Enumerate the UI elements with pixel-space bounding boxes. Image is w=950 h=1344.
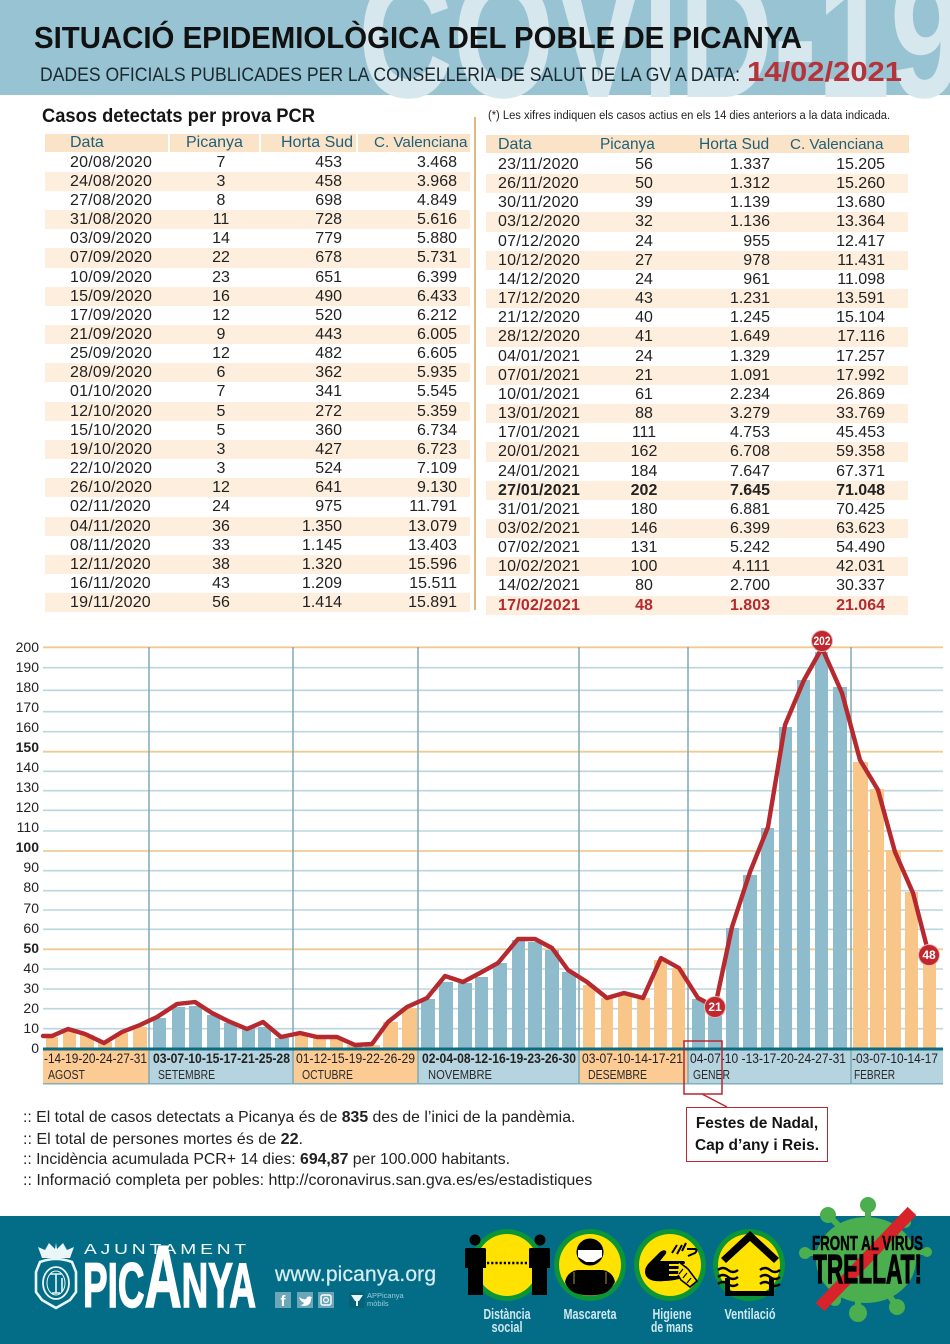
right data table: 45.453 [836,424,885,441]
info text: link: :: Informació completa per pobles: http://coronavirus.san.gva.es/es/estadistiques [23,1172,592,1189]
right data table: 15.205 [836,156,885,173]
left data table: 490 [315,288,342,305]
right data table: 39 [635,194,653,211]
right data table: 07/01/2021 [498,367,580,384]
right data table: 100 [631,558,657,575]
marker: peak 202 [812,630,832,652]
left data table: 5.616 [417,211,457,228]
footnote: (*) Les xifres indiquen els casos actius en els 14 dies anteriors a la data indicada. [488,108,890,122]
left data table: 482 [315,345,342,362]
heading: PCR cases: Casos detectats per prova PCR [42,105,315,127]
callout: holidays [686,1107,828,1162]
right data table: 955 [743,233,770,250]
right data table: 32 [635,213,653,230]
icon: ventilation [713,1229,785,1301]
y axis labels: 180 [16,679,39,695]
date labels: 01-12-15-19-22-26-29 [296,1051,415,1066]
right data table: 67.371 [836,462,885,480]
right data table: 1.139 [730,194,770,211]
left data table: 9 [217,326,225,343]
left data table: 7 [217,154,225,171]
right data table: 59.358 [836,443,885,460]
left table header: C. Valenciana [374,134,467,151]
left data table: 15/10/2020 [70,422,152,439]
right data table: 6.399 [730,520,770,537]
left data table: 23 [212,269,230,286]
right data table: 11.431 [837,252,885,269]
left data table: 975 [315,498,342,515]
month labels: OCTUBRE [302,1067,353,1082]
right data table: 2.234 [730,386,770,403]
right data table: 40 [635,309,653,326]
left data table: 678 [315,249,342,266]
right data table: 1.337 [730,156,770,173]
chart: active cases over time [16,630,943,1107]
left data table: 56 [212,594,230,611]
right data table: 10/12/2020 [498,252,580,269]
left data table: 3.468 [417,154,457,171]
left data table: 26/10/2020 [70,479,152,496]
right data table: 26.869 [836,386,885,403]
info text: total deaths: :: El total de persones mortes és de 22. [23,1130,303,1148]
icon: municipal crest [36,1243,76,1308]
right data table: 14/02/2021 [498,577,580,594]
left data table: 16 [212,288,230,305]
left data table: 6.399 [417,269,457,286]
footer [0,1197,950,1344]
y axis labels: 170 [16,699,39,715]
right data table: 21/12/2020 [498,309,580,326]
left data table: 5.880 [417,230,457,247]
left data table: 01/10/2020 [70,383,152,400]
right data table: 23/11/2020 [498,156,579,173]
subtitle: DADES OFICIALS PUBLICADES PER LA CONSELLERIA DE SALUT DE LA GV A DATA: [40,65,740,86]
date labels: -03-07-10-14-17 [852,1051,938,1066]
marker: peak 202: 202 [814,634,831,648]
right data table: 14/12/2020 [498,271,580,288]
left data table: 19/11/2020 [70,594,151,611]
logo: Picanya wordmark: PICANYA [83,1229,256,1327]
right data table: 111 [632,424,656,441]
title: SITUACIÓ EPIDEMIOLÒGICA DEL POBLE DE PICANYA [34,19,802,55]
marker: latest 48: 48 [922,948,936,962]
left data table: 5 [217,403,225,420]
month labels: SETEMBRE [158,1067,215,1082]
right data table: 54.490 [836,539,885,556]
left data table: 13.079 [408,518,457,535]
left data table: 12/11/2020 [70,556,151,573]
y axis labels: 190 [16,659,39,675]
right data table: 30/11/2020 [498,194,579,211]
right data table: 6.881 [730,501,770,518]
left data table: 5.359 [417,403,457,420]
icon: app [349,1292,365,1308]
right data table: 04/01/2021 [498,348,580,365]
right data table: 42.031 [836,558,885,575]
icon: Facebook: f [280,1293,286,1310]
icon labels: Higiene [652,1306,692,1323]
right data table: 3.279 [730,405,770,422]
y axis labels: 90 [23,859,39,875]
app label: APPicanya [367,1291,405,1300]
right data table: 2.700 [730,577,770,594]
icon: Twitter [297,1292,313,1308]
right data table: 33.769 [836,405,885,422]
icon labels: de mans [651,1319,693,1336]
y axis labels: 130 [16,779,39,795]
right data table: 17.257 [836,348,885,365]
right data table: 4.753 [730,424,770,441]
left data table: 24/08/2020 [70,173,152,190]
left data table: 1.209 [302,575,342,592]
right data table: 10/02/2021 [498,558,580,575]
right table header: Data [498,136,532,153]
blue bars [153,652,847,1049]
right data table: 1.136 [730,213,770,230]
left data table: 520 [315,307,342,324]
left data table: 15/09/2020 [70,288,152,305]
y axis labels: 100 [16,839,39,855]
left data table: 7 [217,383,225,400]
left table header: Picanya [186,134,243,151]
right table header: Horta Sud [699,136,769,153]
x axis [43,1048,943,1050]
left data table: 08/11/2020 [70,537,151,554]
left data table: 6 [217,364,225,381]
right data table: 20/01/2021 [498,443,580,460]
right data table: 56 [635,156,653,173]
icon: Instagram [318,1292,334,1308]
left data table: 43 [212,575,230,592]
right data table: 88 [635,405,653,422]
left data table: 5.935 [417,364,457,381]
right data table: 17.116 [837,328,885,345]
left data table: 362 [315,364,342,381]
left data table: 20/08/2020 [70,154,152,171]
left data table: 16/11/2020 [70,575,151,592]
left data table: 11 [213,211,229,228]
right data table: 6.708 [730,443,770,460]
app label: mòbils [367,1299,389,1308]
left data table: 17/09/2020 [70,307,152,324]
left data table: 6.212 [417,307,457,324]
left data table: 07/09/2020 [70,249,152,266]
right data table: 21 [635,367,653,384]
marker: low 21: 21 [708,1000,722,1014]
left data table: 12/10/2020 [70,403,152,420]
right data table: 17/12/2020 [498,290,580,307]
left data table: 3 [217,441,225,458]
left data table: 1.350 [302,518,342,535]
y axis labels: 20 [23,1000,39,1016]
date labels: 03-07-10-14-17-21 [582,1051,683,1066]
left data table: 443 [315,326,342,343]
left data table: 15.596 [408,556,457,573]
month labels: FEBRER [854,1067,895,1082]
right data table: 26/11/2020 [498,175,579,192]
left data table: 22/10/2020 [70,460,152,477]
right data table: 7.645 [730,482,770,499]
left data table: 5.731 [417,249,457,266]
left table header: Data [70,134,104,151]
right data table: 11.098 [837,271,885,288]
month labels: AGOST [48,1067,85,1082]
icon labels: Distància [484,1306,531,1323]
right data table: 27 [635,252,653,269]
y axis labels [16,639,39,1056]
right data table: 5.242 [730,539,770,556]
left data table: 11.791 [409,498,457,515]
right data table: 31/01/2021 [498,501,580,518]
icon labels: social [492,1319,522,1336]
left data table: 6.723 [417,441,457,458]
right data table: 70.425 [836,501,885,518]
left data table: 360 [315,422,342,439]
icon labels: Ventilació [724,1306,776,1323]
y axis labels: 140 [16,759,39,775]
right data table: 24 [635,233,653,250]
callout: holidays: Festes de Nadal, [696,1115,818,1132]
left data table: 6.734 [417,422,457,439]
left data table: 779 [315,230,342,247]
left data table: 22 [212,249,230,266]
date: 14/02/2021 [747,56,902,87]
left data table: 6.605 [417,345,457,362]
date labels [44,1051,938,1066]
month labels: NOVEMBRE [428,1067,492,1082]
y axis labels: 150 [16,739,39,755]
right data table: 1.329 [730,348,770,365]
right data table: 15.104 [836,309,885,326]
marker: latest 48 [918,944,940,966]
right data table: 21.064 [836,597,885,614]
date labels: 02-04-08-12-16-19-23-26-30 [422,1051,576,1066]
y axis labels: 80 [23,879,39,895]
callout: holidays: Cap d’any i Reis. [695,1137,819,1154]
left data table: 698 [315,192,342,209]
left data table: 12 [212,345,230,362]
right data table: 07/02/2021 [498,539,580,556]
left data table: 524 [315,460,342,477]
connector to callout [702,1094,727,1107]
right data table: 48 [635,597,653,614]
y axis labels: 10 [23,1020,39,1036]
y axis labels: 110 [17,819,39,835]
left data table: 272 [315,403,342,420]
right data table: 28/12/2020 [498,328,580,345]
right data table: 03/12/2020 [498,213,580,230]
marker: low 21 [704,996,726,1018]
left data table: 1.320 [302,556,342,573]
left data table: 458 [315,173,342,190]
left data table: 1.414 [302,594,342,611]
right data table: 17/02/2021 [498,597,580,614]
y axis labels: 160 [16,719,39,735]
website: www.picanya.org [274,1263,436,1286]
right data table: 71.048 [836,482,885,499]
right data table: 13.364 [836,213,885,230]
left data table: 8 [217,192,225,209]
right data table: 30.337 [836,577,885,594]
icon: social distance [465,1229,550,1301]
left data table: 3.968 [417,173,457,190]
right data table: 13/01/2021 [498,405,580,422]
right data table: 03/02/2021 [498,520,580,537]
right data table: 162 [631,443,657,460]
right data table: 50 [635,175,653,192]
left data table: 15.891 [408,594,457,611]
month labels: GENER [693,1067,730,1082]
left data table: 31/08/2020 [70,211,152,228]
right data table: 146 [631,520,657,537]
right data table [486,156,908,615]
right data table: 17/01/2021 [498,424,580,441]
y axis labels: 50 [23,940,39,956]
left data table: 02/11/2020 [70,498,151,515]
right data table: 24 [635,271,653,288]
left table header [45,134,470,152]
month bands [43,1050,943,1084]
left data table: 341 [315,383,342,400]
y axis labels: 70 [23,900,39,916]
month labels: DESEMBRE [588,1067,647,1082]
logo: Ajuntament wordmark: AJUNTAMENT [84,1241,250,1258]
left data table: 651 [315,269,342,286]
right data table: 978 [743,252,770,269]
right data table: 10/01/2021 [498,386,580,403]
header banner [0,0,950,100]
orange bars [46,762,936,1049]
icon labels: Mascareta [564,1306,617,1323]
y axis labels: 60 [23,920,39,936]
left data table: 641 [315,479,342,496]
left data table: 10/09/2020 [70,269,152,286]
right data table: 63.623 [836,520,885,537]
case line [43,648,929,1045]
left data table: 427 [315,441,342,458]
left data table: 453 [315,154,342,171]
right table header [486,135,909,153]
left data table: 14 [212,230,230,247]
right data table: 43 [635,290,653,307]
left data table: 4.849 [417,192,457,209]
right data table: 184 [631,462,657,480]
left data table: 24 [212,498,230,515]
right table header: Picanya [600,136,655,153]
left data table: 3 [217,173,225,190]
y axis labels: 200 [16,639,39,655]
right data table: 13.680 [836,194,885,211]
right data table: 1.231 [730,290,770,307]
right data table: 1.091 [730,367,770,384]
left data table [45,154,470,612]
right data table: 1.649 [730,328,770,345]
left data table: 27/08/2020 [70,192,152,209]
left data table: 38 [212,556,230,573]
right data table: 80 [635,577,653,594]
right data table: 24/01/2021 [498,462,580,480]
y axis labels: 0 [31,1040,39,1056]
right data table: 24 [635,348,653,365]
right table header: C. Valenciana [790,136,883,153]
icon: Facebook [275,1292,291,1310]
left data table: 6.433 [417,288,457,305]
left data table: 15.511 [409,575,457,592]
y axis labels: 120 [16,799,39,815]
right data table: 1.245 [730,309,770,326]
info text: total cases: :: El total de casos detectats a Picanya és de 835 des de l’inici de la pandèmia. [23,1109,575,1126]
left data table: 728 [315,211,342,228]
month labels [48,1067,895,1082]
left data table: 3 [217,460,225,477]
left data table: 19/10/2020 [70,441,152,458]
right data table: 4.111 [732,558,770,575]
left data table: 9.130 [417,479,457,496]
right data table: 17.992 [836,367,885,384]
right data table: 961 [743,271,770,288]
left data table: 25/09/2020 [70,345,152,362]
right data table: 1.312 [730,175,770,192]
icon labels [484,1306,776,1336]
date labels: 03-07-10-15-17-21-25-28 [153,1051,290,1066]
right data table: 131 [631,539,657,556]
date labels: -14-19-20-24-27-31 [44,1051,147,1066]
left data table: 36 [212,518,230,535]
right data table: 12.417 [836,233,885,250]
info text: incidence: :: Incidència acumulada PCR+ 14 dies: 694,87 per 100.000 habitants. [23,1151,510,1168]
icon: face mask [554,1229,626,1301]
left data table: 03/09/2020 [70,230,152,247]
left data table: 5 [217,422,225,439]
y axis labels: 30 [23,980,39,996]
right data table: 27/01/2021 [498,482,580,499]
badge: front al virus [799,1197,932,1322]
left data table: 04/11/2020 [70,518,151,535]
right data table: 1.803 [730,597,770,614]
left data table: 1.145 [302,537,342,554]
left data table: 12 [212,479,230,496]
left data table: 6.005 [417,326,457,343]
right data table: 7.647 [730,462,770,480]
right data table: 61 [635,386,653,403]
left data table: 28/09/2020 [70,364,152,381]
left data table: 21/09/2020 [70,326,152,343]
holiday highlight box [684,1041,722,1094]
right data table: 15.260 [836,175,885,192]
left data table: 33 [212,537,230,554]
y axis labels: 40 [23,960,39,976]
left data table: 5.545 [417,383,457,400]
left data table: 13.403 [408,537,457,554]
right data table: 41 [635,328,653,345]
right data table: 13.591 [836,290,885,307]
divider between tables [474,117,476,610]
left data table: 12 [212,307,230,324]
date labels: 04-07-10 -13-17-20-24-27-31 [690,1051,846,1066]
right data table: 202 [631,482,657,499]
left table header: Horta Sud [281,134,353,151]
icon: hand washing [634,1229,706,1301]
right data table: 180 [631,501,657,518]
left data table: 7.109 [417,460,457,477]
right data table: 07/12/2020 [498,233,580,250]
